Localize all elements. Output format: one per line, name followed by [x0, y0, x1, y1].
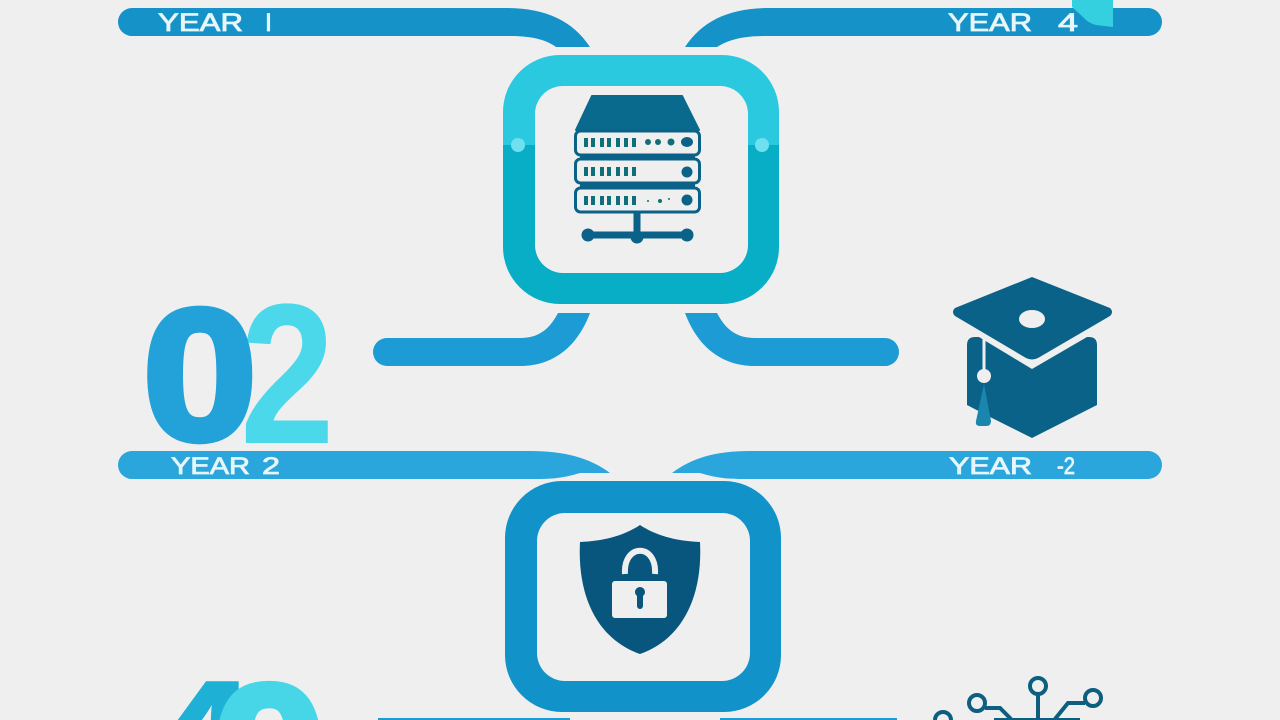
icon: circuit network — [935, 678, 1101, 720]
label: year 4: YEAR — [948, 9, 1032, 37]
label: year 4 — [948, 9, 1078, 37]
label: year 1: I — [265, 9, 272, 37]
connector bar: bottom right — [720, 718, 897, 720]
number: 40 — [141, 640, 326, 720]
label: year 2 left: YEAR — [171, 453, 250, 480]
icon: shield with padlock — [580, 525, 700, 654]
panel: security frame — [505, 481, 781, 712]
number: 02: 2 — [240, 263, 335, 486]
connector bar: year 1 — [118, 8, 590, 47]
label: year -2 right: -2 — [1057, 453, 1075, 480]
connector bar: lower left of server — [373, 313, 590, 366]
label: year 2 left — [171, 453, 280, 480]
connector bar: year 2 right — [672, 451, 1162, 480]
connector bar: lower right of server — [685, 313, 899, 366]
connector bar: bottom left — [378, 718, 570, 720]
label: year -2 right — [949, 453, 1075, 480]
label: year 2 left: 2 — [262, 453, 280, 480]
connector bar: year 4 — [685, 0, 1162, 47]
icon: server rack — [576, 96, 700, 244]
corner tab — [1072, 0, 1113, 27]
panel: server frame — [503, 55, 779, 304]
number: 02: 0 — [143, 272, 257, 479]
label: year 4: 4 — [1058, 9, 1078, 37]
number: 02 — [143, 263, 335, 486]
label: year 1 — [158, 9, 272, 37]
icon: graduation cap — [953, 277, 1112, 438]
label: year 1: YEAR — [158, 9, 243, 37]
label: year -2 right: YEAR — [949, 453, 1032, 480]
connector bar: year 2 left — [118, 451, 610, 480]
